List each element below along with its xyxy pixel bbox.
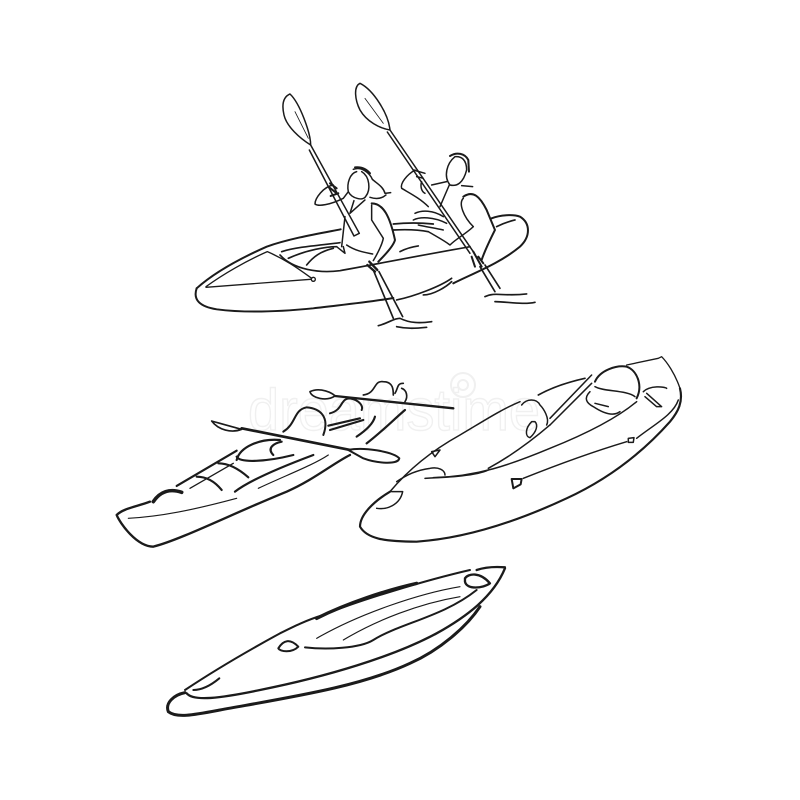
deck details <box>397 366 667 488</box>
kayak hull <box>196 215 528 312</box>
paddlers and rear paddle <box>283 382 453 435</box>
hull <box>360 357 681 542</box>
deck details <box>193 575 490 690</box>
woman with paddle <box>283 94 432 328</box>
hull <box>168 567 505 715</box>
closed-deck kayak <box>168 567 505 715</box>
paddle front <box>212 421 399 463</box>
inflatable kayak <box>360 357 681 542</box>
kayak hull <box>117 410 405 547</box>
scene: two paddlers in a kayak <box>196 83 535 328</box>
watermark: dreamstime <box>248 378 540 443</box>
man with paddle <box>356 83 535 303</box>
kayak with two paddlers seen from behind <box>117 382 453 547</box>
